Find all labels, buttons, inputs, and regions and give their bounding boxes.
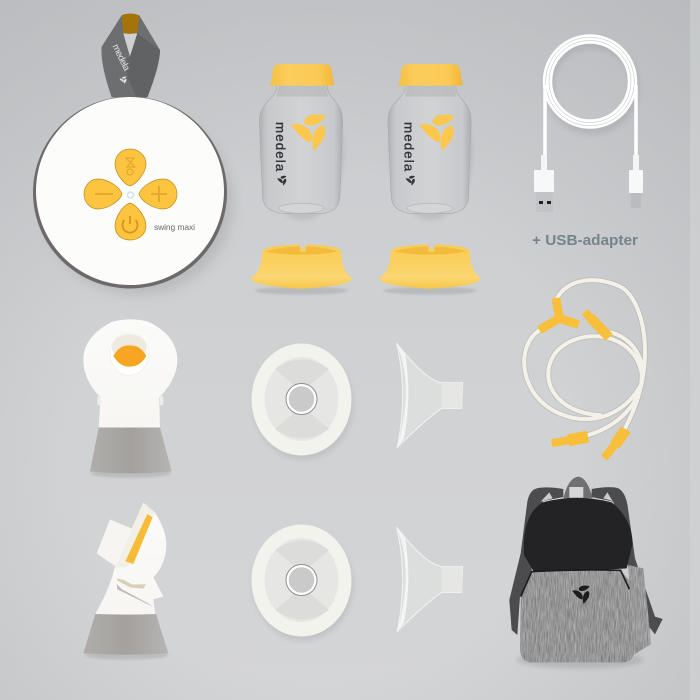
- grey base: [83, 614, 168, 655]
- white body: [83, 319, 177, 427]
- zipper: [521, 570, 629, 597]
- funnel side view bottom: [397, 527, 463, 631]
- tube plug bottom left: [552, 437, 588, 443]
- USB label: + USB-adapter: [532, 232, 638, 249]
- tubes: [524, 280, 645, 435]
- bottle collar 2: [379, 245, 480, 295]
- small logo: [405, 176, 415, 186]
- USB cable: [532, 37, 643, 249]
- status light: [128, 192, 134, 198]
- white face: [36, 97, 224, 285]
- breast shield connector front view: [83, 319, 177, 478]
- button: bottom: [115, 203, 146, 240]
- USB-A plug: [534, 155, 554, 212]
- yellow strip: [125, 514, 153, 564]
- white body: [95, 503, 166, 614]
- bottle 2: [388, 64, 473, 220]
- black upper panel: [524, 498, 633, 571]
- USB-C plug: [629, 155, 643, 208]
- flange disc top: [252, 344, 353, 460]
- brand text: medela: [401, 122, 416, 172]
- cable coil: [545, 37, 636, 160]
- funnel side view top: [397, 343, 463, 447]
- left shoulder strap: [509, 487, 563, 635]
- clip detail: [117, 578, 146, 589]
- bottle cap: [398, 64, 463, 86]
- bottle cap: [269, 64, 335, 86]
- bottle 1: [259, 64, 344, 220]
- hanging strap: [101, 14, 160, 97]
- tube plug bottom right: [604, 429, 626, 458]
- flange disc bottom: [252, 524, 353, 641]
- logo: [419, 115, 454, 151]
- button: left: [84, 179, 122, 209]
- Y connector: [539, 298, 579, 330]
- strap brand text: medela: [111, 42, 132, 73]
- strap logo: [119, 77, 127, 84]
- bag logo: [572, 586, 590, 604]
- breast shield connector side view: [83, 503, 168, 660]
- tube plug top: [585, 312, 609, 337]
- square back port: [97, 519, 137, 566]
- pump motor unit: [33, 14, 233, 295]
- orange membrane: [113, 345, 146, 367]
- heather grey lower panel: [520, 571, 634, 662]
- top handle: [563, 477, 593, 498]
- right shoulder strap: [592, 487, 663, 634]
- bottle collar 1: [251, 245, 352, 295]
- outer grey housing: [33, 96, 227, 288]
- side pocket: [628, 565, 651, 655]
- brand text: medela: [273, 122, 288, 172]
- button: right: [139, 179, 177, 209]
- button: top: [115, 149, 146, 186]
- logo: [291, 115, 326, 151]
- model label: swing maxi: [154, 222, 195, 232]
- button glyphs: [95, 158, 167, 233]
- backpack: [509, 477, 663, 669]
- small logo: [277, 176, 287, 186]
- grey base: [90, 428, 172, 473]
- silicone tubing: [524, 280, 645, 458]
- cup: [110, 333, 149, 375]
- yellow control buttons: [84, 149, 177, 240]
